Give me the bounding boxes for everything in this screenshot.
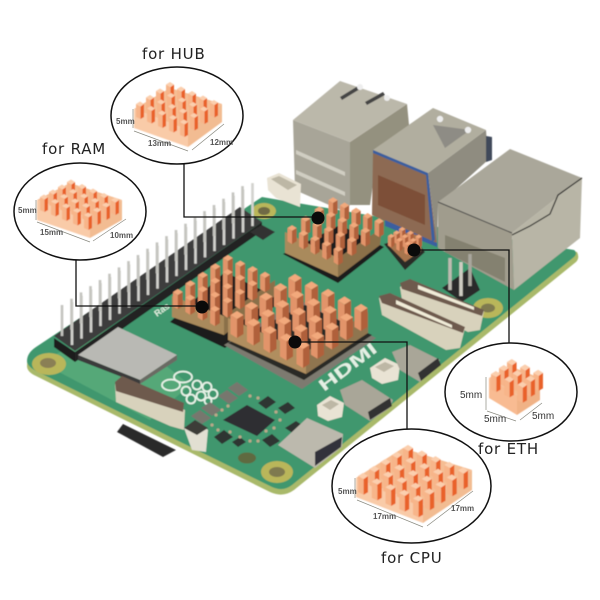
CPU chip and heatsink [224, 274, 376, 389]
white connector top [267, 173, 301, 207]
micro SD card [117, 424, 176, 457]
heading: for HUB: for HUB [142, 45, 206, 63]
small components [214, 396, 305, 447]
ribbon connector bottom [379, 293, 465, 350]
HUB chip and heatsink [283, 197, 384, 283]
dimension labels [116, 117, 233, 148]
Raspberry Pi logo [162, 372, 218, 404]
callout circle [111, 67, 243, 164]
wifi module shield [78, 327, 177, 384]
dimension labels: 5mm [532, 411, 554, 422]
middle USB stack [372, 108, 492, 247]
dimension labels: 5mm [116, 117, 135, 126]
USB-C port [278, 418, 343, 468]
RAM chip and heatsink [170, 255, 282, 348]
callout: RAM heatsink [14, 140, 146, 260]
micro HDMI port lower [340, 380, 393, 421]
dimension labels: 17mm [451, 504, 474, 513]
mounting hole right [473, 298, 503, 318]
GPIO header block [54, 207, 262, 362]
heading: for CPU: for CPU [381, 549, 442, 567]
power chip [223, 405, 275, 436]
heatsink illustration [134, 82, 222, 147]
ethernet jack [438, 149, 582, 290]
callout circle [445, 343, 577, 441]
board edge [27, 200, 578, 495]
dimension labels: 17mm [373, 512, 396, 521]
dimension lines [133, 109, 224, 151]
micro HDMI port upper [392, 345, 441, 382]
fan header [442, 254, 480, 302]
mounting hole left [32, 353, 66, 375]
callout: ETH heatsink [445, 343, 577, 458]
small hole [238, 452, 256, 464]
mounting hole bottom [261, 461, 293, 483]
heatsink illustration [356, 445, 472, 523]
heatsink illustration [37, 180, 122, 238]
heading: for RAM: for RAM [42, 140, 106, 158]
dimension labels: 15mm [40, 228, 63, 237]
white connector upper [370, 358, 400, 384]
dimension labels: 13mm [148, 139, 171, 148]
heading: for ETH: for ETH [478, 440, 539, 458]
dimension labels [460, 390, 554, 425]
left USB stack [293, 81, 410, 212]
leader dot: RAM [196, 300, 208, 314]
HDMI silkscreen: HDMI [315, 339, 381, 395]
inductors [191, 382, 248, 424]
callout: HUB heatsink [111, 45, 243, 164]
passive parts [210, 394, 282, 443]
ETH chip and heatsink [384, 227, 425, 270]
white connector lower [317, 396, 344, 421]
heatsink illustration [489, 359, 543, 415]
leader line: ETH [414, 250, 509, 343]
dimension labels [18, 206, 133, 240]
light PCB area [40, 325, 190, 420]
dimension labels: 12mm [210, 138, 233, 147]
dimension labels: 5mm [460, 390, 482, 401]
small SOT chip [250, 225, 275, 240]
callout circle [332, 429, 491, 543]
callout: CPU heatsink [332, 429, 491, 567]
reset button [184, 420, 208, 452]
dimension labels [338, 487, 474, 521]
dimension lines [486, 377, 542, 421]
camera connector [115, 376, 185, 430]
circuit board assembly [27, 81, 582, 495]
leader line: HUB [184, 164, 318, 217]
leader dot: CPU [288, 336, 302, 348]
ribbon connector top [400, 279, 484, 332]
dimension lines [355, 478, 473, 527]
dimension labels: 5mm [484, 414, 506, 425]
dimension labels: 10mm [110, 231, 133, 240]
mounting hole top [252, 203, 276, 219]
leader dot: ETH [408, 244, 420, 256]
leader dot: HUB [312, 212, 324, 224]
leader line: CPU [295, 342, 407, 429]
GPIO pins [62, 183, 252, 345]
dimension labels: 5mm [338, 487, 357, 496]
dimension labels: 5mm [18, 206, 37, 215]
dimension lines [36, 200, 126, 242]
leader line: RAM [76, 260, 202, 306]
callout circle [14, 163, 146, 260]
green PCB [27, 197, 576, 489]
Raspberry silkscreen: Ras [152, 301, 172, 319]
